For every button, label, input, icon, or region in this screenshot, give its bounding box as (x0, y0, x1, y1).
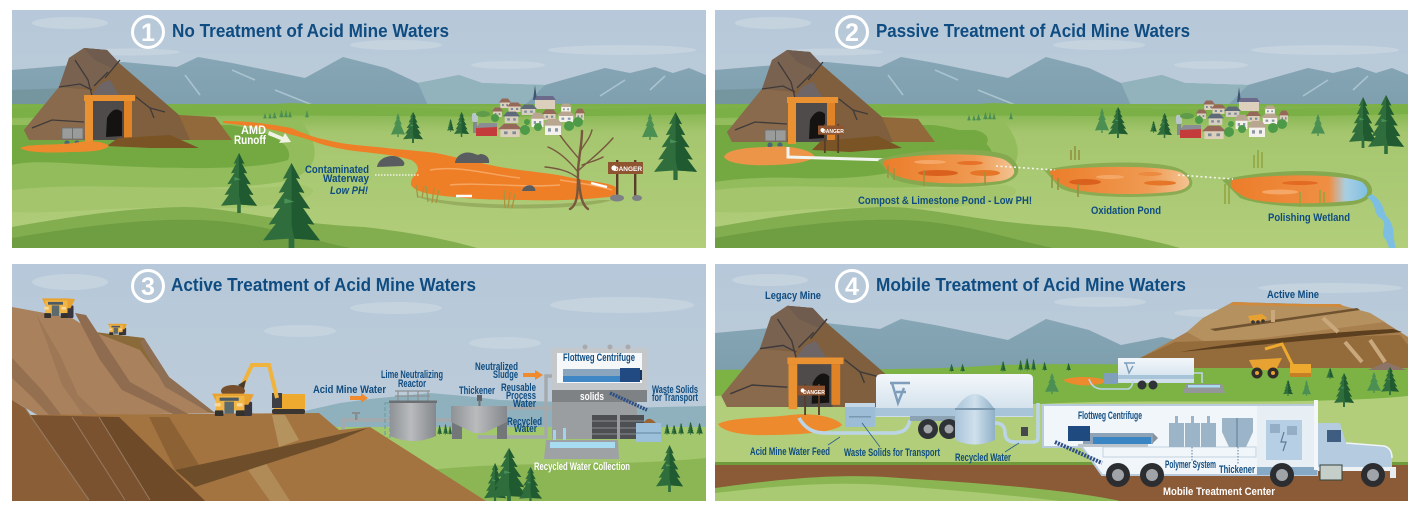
label: waste solids: for Transport (652, 392, 698, 404)
label: recycled water: Recycled (507, 416, 542, 428)
ore cart (62, 128, 83, 146)
title 1: No Treatment of Acid Mine Waters (172, 21, 449, 41)
number badge 4: 4 (845, 273, 859, 301)
label: recycled water: Recycled Water (955, 452, 1011, 464)
trees (484, 445, 683, 504)
label: waste solids: Waste Solids (652, 384, 698, 396)
number badge 3: 3 (141, 273, 155, 301)
clouds (32, 274, 694, 349)
lime neutralizing reactor (385, 391, 437, 441)
polymer system (1169, 416, 1216, 447)
number badge 2 (836, 16, 868, 48)
label: AMD Runoff (234, 123, 267, 147)
polishing wetland (1222, 150, 1396, 248)
label: feed: Acid Mine Water Feed (750, 446, 830, 458)
small remote puddle (1063, 377, 1108, 385)
panel: 2 passive treatment (715, 10, 1409, 250)
label: reusable process water: Reusable (501, 382, 536, 394)
distant trees (263, 110, 309, 119)
dirt road (715, 465, 1408, 501)
label: AMD Runoff: AMD (241, 123, 266, 137)
valve (352, 412, 360, 420)
planks (812, 136, 902, 152)
trees (1095, 95, 1404, 154)
grass tufts (416, 185, 515, 208)
small hill truck (1248, 314, 1267, 324)
arrow: sludge (523, 370, 543, 380)
excavator (238, 365, 305, 414)
danger sign: DANGER (803, 390, 825, 396)
centrifuge (563, 368, 642, 382)
electrical panel (1266, 420, 1302, 460)
feed pipe (799, 418, 910, 433)
danger sign: DANGER (822, 129, 844, 135)
village (472, 85, 585, 137)
label: reusable process water: Process (506, 390, 536, 402)
label: centrifuge: Flottweg Centrifuge (563, 352, 635, 364)
danger sign (818, 124, 844, 153)
wooden planks (107, 135, 199, 148)
trees (221, 112, 697, 251)
foreground grass (715, 476, 1120, 501)
orange puddle (20, 141, 109, 153)
upper mine slope (12, 307, 215, 416)
panel: 1 no treatment (12, 10, 706, 251)
contaminated river (223, 121, 617, 200)
label: contaminated waterway (305, 164, 370, 197)
clouds (732, 274, 1402, 317)
title 4: Mobile Treatment of Acid Mine Waters (876, 275, 1186, 295)
label: neutralized sludge: Sludge (493, 369, 518, 381)
distant trees (949, 358, 1071, 372)
far mountains (304, 393, 706, 427)
rocks (377, 152, 535, 191)
label: centrifuge: Flottweg Centrifuge (1078, 410, 1142, 422)
centrifuge building (552, 344, 647, 439)
label: acid mine water: Acid Mine Water (313, 384, 387, 396)
dashed leaders (1192, 447, 1238, 464)
mine entrance (727, 50, 935, 144)
label: reusable process water (501, 382, 537, 410)
thickener (1222, 418, 1253, 447)
label: contaminated waterway: Low PH! (330, 185, 368, 197)
label: reactor: Lime Neutralizing (381, 369, 443, 381)
wheels (1106, 463, 1385, 487)
recycled water tank (544, 440, 619, 459)
title 2: Passive Treatment of Acid Mine Waters (876, 21, 1190, 41)
label: reactor (381, 369, 443, 390)
active mine mountain (1140, 302, 1408, 370)
label: thickener: Thickener (1219, 464, 1255, 476)
river bank shadow (415, 195, 612, 208)
recycled water pipe (995, 403, 1038, 442)
label: recycled water collection: Recycled Water Collection (534, 461, 630, 473)
arrow: acid mine water (350, 393, 368, 403)
recycled water tank (955, 394, 995, 444)
dotted flow lines (996, 166, 1233, 179)
label: contaminated waterway: Waterway (323, 173, 370, 185)
label: reactor: Reactor (398, 378, 426, 390)
conveyor (1055, 442, 1102, 463)
trees (1045, 367, 1399, 407)
label: waste solids (652, 384, 698, 404)
waste bin (636, 419, 661, 442)
waste bin (845, 403, 875, 427)
panel: 4 mobile treatment (715, 264, 1408, 501)
dump truck and excavator (1249, 344, 1311, 378)
compost and limestone pond (878, 150, 1018, 187)
mine entrance (24, 48, 232, 142)
cab (1318, 423, 1392, 467)
lower mine terrace (12, 400, 486, 501)
number badge 1 (132, 16, 164, 48)
label: neutralized sludge (475, 361, 518, 381)
label: contaminated waterway: Contaminated (305, 164, 369, 176)
haul truck small (108, 324, 127, 335)
orange puddle (724, 147, 815, 165)
number badge 3 (132, 270, 164, 302)
number badge 4 (836, 270, 868, 302)
label: recycled water (507, 416, 542, 435)
centrifuge (1068, 426, 1158, 447)
distant trees and village (967, 112, 1013, 121)
screw conveyor (610, 393, 647, 410)
orange puddle (718, 414, 842, 435)
label: compost pond: Compost & Limestone Pond - Low PH! (858, 195, 1032, 207)
label: mobile treatment center: Mobile Treatment Center (1163, 486, 1276, 498)
danger sign (798, 384, 825, 415)
number badge 1: 1 (141, 19, 155, 47)
panel: 3 active treatment (12, 264, 706, 504)
trailer body (1043, 405, 1317, 475)
pipe (788, 147, 892, 160)
label: neutralized sludge: Neutralized (475, 361, 518, 373)
title 3: Active Treatment of Acid Mine Waters (171, 275, 476, 295)
legacy mine (721, 306, 950, 409)
sky (715, 264, 1408, 389)
danger sign (608, 160, 643, 202)
storage trailer (876, 374, 1033, 439)
haul truck main (212, 385, 254, 416)
haul truck top (42, 298, 75, 318)
label: active mine: Active Mine (1267, 289, 1319, 301)
falling water (553, 428, 566, 445)
thickener tank (451, 395, 507, 439)
label: oxidation pond: Oxidation Pond (1091, 205, 1161, 217)
label: legacy mine: Legacy Mine (765, 290, 821, 302)
sky (12, 264, 706, 415)
label: recycled water: Water (514, 423, 538, 435)
ground (336, 427, 706, 470)
extended green around mine (715, 130, 988, 182)
label: AMD Runoff: Runoff (234, 133, 267, 147)
bones and fish (456, 183, 607, 196)
oxidation pond (1044, 146, 1192, 197)
danger sign: DANGER (614, 166, 642, 173)
label: thickener: Thickener (459, 385, 495, 397)
leader lines (828, 423, 1019, 452)
ore cart (765, 130, 786, 148)
dead tree (545, 130, 613, 209)
label: polymer system: Polymer System (1165, 459, 1216, 471)
arrow: runoff (268, 131, 291, 143)
label: reusable process water: Water (513, 398, 537, 410)
label: waste solids: Waste Solids for Transport (844, 447, 940, 459)
ground (715, 364, 1408, 465)
distant trees (437, 422, 703, 435)
number badge 2: 2 (845, 19, 859, 47)
label: polishing wetland: Polishing Wetland (1268, 212, 1350, 224)
mobile treatment center truck (1043, 400, 1396, 487)
small mobile unit (1089, 358, 1225, 393)
label: solids: solids (580, 391, 604, 403)
far mountains (715, 319, 1270, 372)
process pipes (343, 376, 561, 437)
leader line (375, 174, 420, 176)
